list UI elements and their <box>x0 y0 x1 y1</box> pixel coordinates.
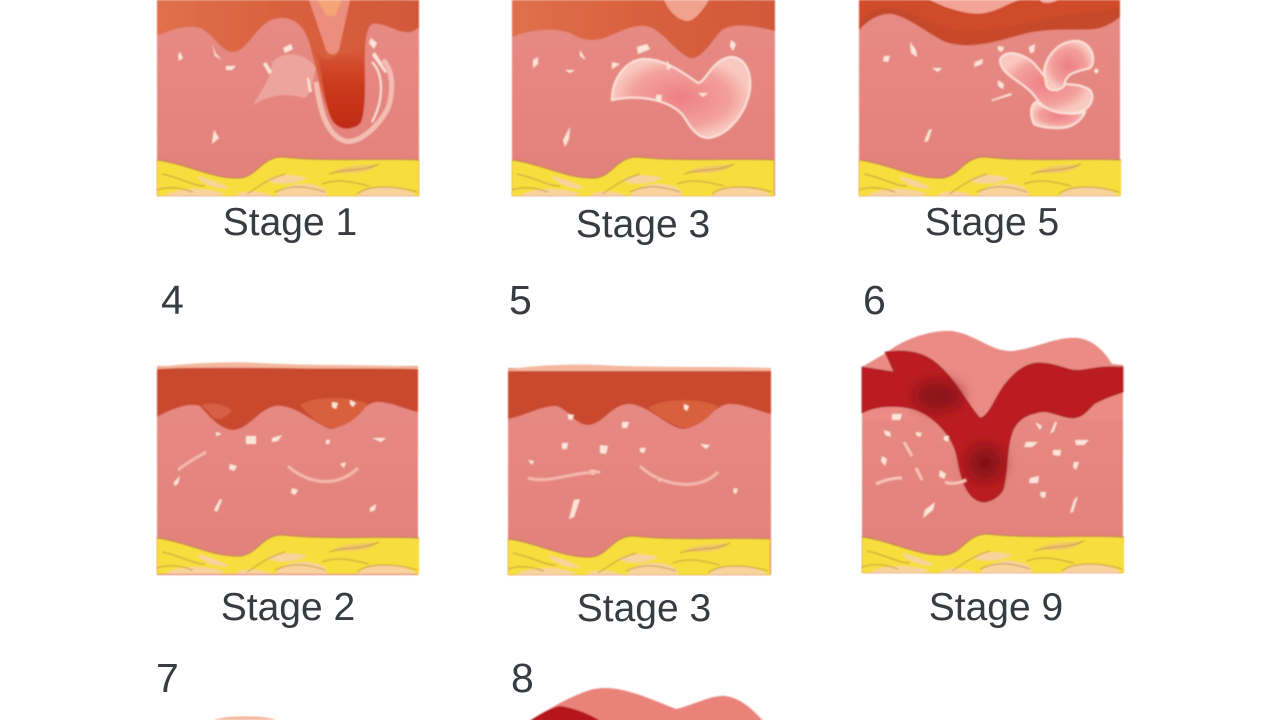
panel: stage 5 illustration <box>859 0 1120 196</box>
dark red wound band <box>862 351 1123 502</box>
wound core <box>316 40 365 128</box>
label: Stage 3 middle: Stage 3 <box>577 587 711 630</box>
orange band highlight <box>859 0 1120 31</box>
fat layer stage 9 <box>862 534 1124 573</box>
red band <box>508 370 771 429</box>
pink raised bump <box>862 331 1123 420</box>
top pale wedge <box>309 0 350 54</box>
label: Stage 9: Stage 9 <box>929 586 1063 629</box>
dark centres <box>914 381 962 411</box>
specks <box>174 400 386 512</box>
panel: stage 8 partial top <box>528 688 764 720</box>
pale wound blob <box>612 57 750 138</box>
pale top strip <box>508 365 771 371</box>
pale tissue patch <box>253 54 316 105</box>
fat layer stage 3 middle <box>508 536 770 575</box>
fat layer stage 1 <box>157 157 419 196</box>
label: Stage 2: Stage 2 <box>221 586 355 629</box>
specks <box>528 404 738 519</box>
specks <box>533 40 736 147</box>
upper layer <box>512 0 775 58</box>
panel: stage 7 partial top <box>214 716 276 720</box>
tangled pale wound <box>1000 41 1093 128</box>
panel: stage 3 illustration (top) <box>512 0 775 196</box>
label: Stage 5: Stage 5 <box>925 201 1059 244</box>
red band <box>157 368 418 430</box>
lesion patch <box>300 398 368 428</box>
fat layer stage 2 <box>157 535 419 574</box>
pale top strip <box>157 362 418 369</box>
number 5: 5 <box>509 277 532 323</box>
dark red band <box>859 0 1120 45</box>
top pale wedge <box>930 0 1058 14</box>
panel: stage 3 illustration (middle) <box>508 365 771 575</box>
fat layer stage 3 top <box>512 157 774 196</box>
label: Stage 1: Stage 1 <box>223 201 357 244</box>
panel: stage 2 illustration <box>157 362 418 575</box>
specks <box>883 42 1099 142</box>
fat layer stage 5 <box>859 157 1121 196</box>
pink bump <box>528 688 764 720</box>
lesion patch <box>648 400 718 428</box>
label: Stage 3 top: Stage 3 <box>576 203 710 246</box>
white wound rim <box>316 60 392 141</box>
number 8: 8 <box>511 655 534 701</box>
red wound <box>528 706 602 720</box>
number 6: 6 <box>863 277 886 323</box>
top pale wedge <box>664 0 709 21</box>
number 7: 7 <box>156 655 179 701</box>
number 4: 4 <box>161 277 184 323</box>
specks <box>178 38 387 144</box>
panel: stage 9 illustration <box>862 331 1123 573</box>
upper layer with deep wound <box>157 0 419 129</box>
specks <box>881 414 1089 518</box>
panel: stage 1 illustration <box>157 0 419 196</box>
